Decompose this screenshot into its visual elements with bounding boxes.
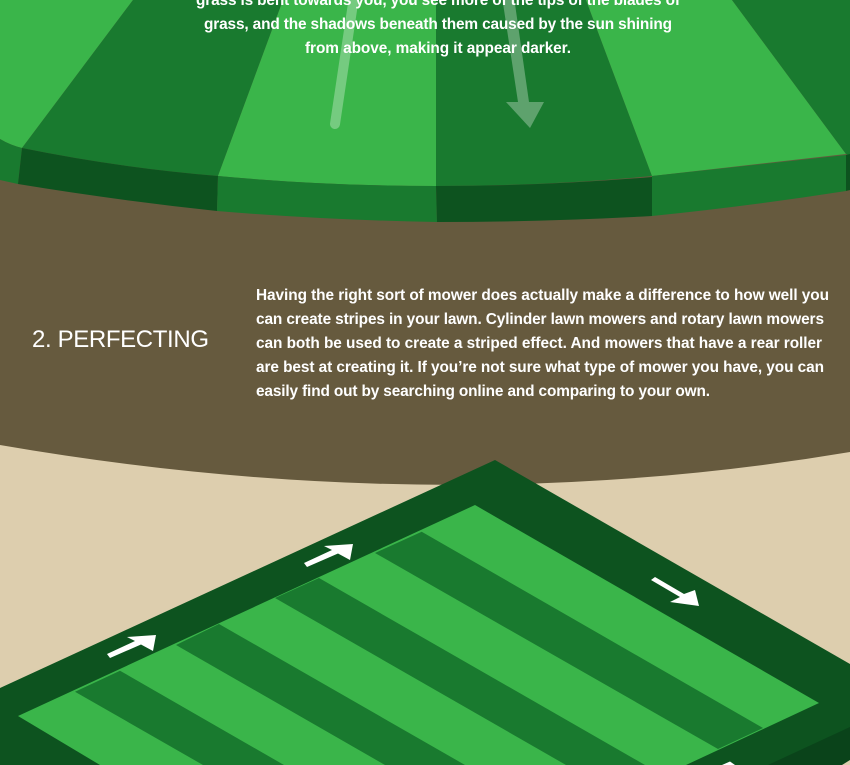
corner ground [842,760,850,765]
arrow: bottom edge, partly cropped [722,762,735,765]
lawn border [0,460,850,765]
arrow: top-left edge 2 [304,544,353,567]
text block: mower description: easily find out by searching online and comparing to your own. [256,383,710,400]
text block: intro explanation: grass, and the shadows beneath them caused by the sun shining [204,16,672,33]
illustration: striped lawn disc [0,0,850,222]
text block: mower description: Having the right sort of mower does actually make a difference to how well you [256,287,829,304]
text block: intro explanation [196,0,681,57]
arrow: top-left edge 1 [107,635,156,658]
lawn side shadow [768,727,850,765]
text block: mower description: are best at creating it. If you’re not sure what type of mower you have, you can [256,359,824,376]
lawn surface [18,505,819,765]
heading: 2. Perfecting: 2. PERFECTING [32,326,209,353]
panel: cream ground below curve [0,445,850,765]
text block: mower description [256,287,829,400]
arrow: faint up stripe direction [335,0,355,124]
text block: mower description: can both be used to create a striped effect. And mowers that have a rear roller [256,335,822,352]
arrow: faint down stripe direction [501,0,544,128]
illustration: isometric lawn [0,460,850,765]
text block: mower description: can create stripes in your lawn. Cylinder lawn mowers and rotary lawn mowers [256,311,824,328]
dark stripes [75,532,763,765]
text block: intro explanation: from above, making it appear darker. [305,40,571,57]
arrow: top-right edge [651,577,699,606]
